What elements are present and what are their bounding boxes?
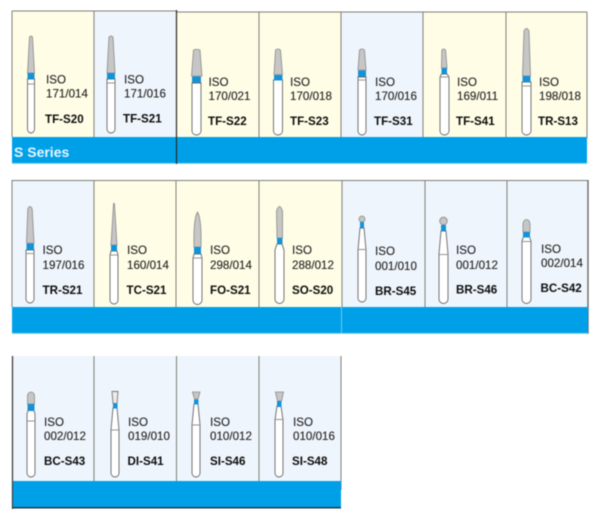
blue bar row 2 — [12, 307, 588, 334]
label DI-S41: ISO — [128, 416, 148, 429]
label TF-S23 — [290, 76, 332, 128]
label SI-S48: 010/016 — [293, 430, 335, 443]
label TF-S20: ISO — [46, 74, 66, 86]
bur BR-S45 — [358, 216, 366, 302]
label TF-S22: ISO — [208, 76, 228, 89]
label SI-S48: SI-S48 — [292, 455, 328, 468]
bur DI-S41 — [111, 392, 119, 477]
label BR-S46: ISO — [456, 244, 476, 257]
bur TF-S41 — [440, 49, 449, 135]
blue bar with S Series label: S Series — [14, 144, 69, 160]
label TR-S13 — [538, 76, 581, 128]
blue bar with S Series label — [12, 137, 587, 164]
label TF-S23: TF-S23 — [290, 115, 329, 128]
label SI-S46: ISO — [210, 416, 230, 429]
label FO-S21: FO-S21 — [210, 284, 251, 297]
label SO-S20: ISO — [292, 244, 312, 257]
label DI-S41: 019/010 — [128, 430, 170, 443]
bur TF-S23 — [274, 49, 282, 135]
label TF-S31: 170/016 — [375, 90, 417, 103]
bur TF-S31 — [358, 49, 366, 135]
label BC-S42 — [540, 243, 583, 295]
label SO-S20: 288/012 — [292, 259, 334, 272]
label TR-S21 — [42, 244, 84, 297]
label FO-S21: ISO — [210, 244, 230, 257]
label TR-S21: ISO — [42, 244, 62, 257]
bur SO-S20 — [275, 206, 284, 304]
label TF-S21 — [123, 74, 166, 126]
panel: row 2 — [12, 180, 588, 334]
label BR-S46: 001/012 — [456, 259, 498, 272]
bur TF-S21 — [107, 36, 115, 133]
cell backgrounds row 2 — [12, 180, 588, 334]
label TF-S21: 171/016 — [124, 88, 166, 100]
label SO-S20 — [292, 244, 334, 297]
label BR-S45: BR-S45 — [375, 285, 417, 298]
label TF-S20 — [45, 74, 88, 126]
bur TR-S21 — [26, 206, 34, 303]
bur TC-S21 — [110, 203, 118, 304]
cell backgrounds row 1 — [12, 11, 587, 138]
bur TR-S13 — [522, 28, 531, 135]
label BC-S42: 002/014 — [541, 257, 583, 270]
label SI-S48 — [292, 416, 335, 468]
label TF-S41: TF-S41 — [456, 115, 495, 128]
label SI-S46: 010/012 — [210, 430, 252, 443]
bur TF-S20 — [28, 36, 34, 133]
label TF-S20: 171/014 — [46, 88, 88, 100]
label TF-S31: ISO — [375, 76, 395, 89]
label BC-S43: ISO — [44, 416, 64, 429]
label TR-S13: TR-S13 — [538, 115, 578, 128]
bur BC-S42 — [522, 220, 531, 304]
label TR-S13: ISO — [539, 76, 559, 89]
label BR-S45 — [375, 245, 417, 298]
bur SI-S48 — [275, 392, 284, 477]
label TF-S41: 169/011 — [457, 90, 498, 103]
label TF-S21: TF-S21 — [123, 112, 162, 126]
label BC-S43: 002/012 — [44, 430, 86, 443]
label BC-S42: ISO — [541, 243, 561, 256]
label TF-S31 — [374, 76, 417, 128]
blue bar row 3 — [12, 481, 341, 508]
panel: row 3 — [12, 356, 341, 509]
label SI-S48: ISO — [293, 416, 313, 429]
label TC-S21: 160/014 — [127, 259, 169, 272]
label DI-S41: DI-S41 — [128, 455, 164, 468]
panel: row 1 S Series — [12, 10, 587, 164]
label SI-S46: SI-S46 — [210, 455, 246, 468]
label TF-S22 — [208, 76, 250, 128]
label BC-S43 — [44, 416, 86, 468]
label TC-S21 — [126, 244, 169, 297]
label TR-S21: 197/016 — [42, 259, 84, 272]
label TF-S21: ISO — [124, 74, 144, 86]
label FO-S21: 298/014 — [210, 259, 252, 272]
label BR-S46 — [456, 244, 498, 296]
cell backgrounds row 3 — [12, 356, 341, 509]
label TC-S21: ISO — [127, 244, 147, 257]
bur TF-S22 — [192, 49, 202, 135]
label DI-S41 — [128, 416, 170, 468]
label BC-S43: BC-S43 — [44, 455, 86, 468]
label BR-S45: 001/010 — [375, 260, 417, 273]
label TF-S41: ISO — [457, 76, 477, 89]
bur FO-S21 — [193, 212, 202, 304]
label TC-S21: TC-S21 — [126, 284, 167, 297]
label TF-S23: ISO — [290, 76, 310, 89]
label TF-S20: TF-S20 — [45, 113, 84, 126]
label TF-S22: 170/021 — [208, 90, 250, 103]
label TR-S21: TR-S21 — [42, 284, 83, 297]
label FO-S21 — [210, 244, 252, 297]
label TF-S41 — [456, 76, 498, 128]
bur BR-S46 — [439, 217, 448, 304]
bur SI-S46 — [192, 392, 200, 477]
label BR-S46: BR-S46 — [456, 284, 498, 296]
bur BC-S43 — [27, 392, 35, 477]
label BR-S45: ISO — [375, 245, 395, 258]
label TF-S31: TF-S31 — [374, 115, 413, 128]
label BC-S42: BC-S42 — [540, 282, 582, 295]
label SI-S46 — [210, 416, 252, 468]
label SO-S20: SO-S20 — [292, 284, 333, 297]
label TF-S22: TF-S22 — [208, 115, 247, 128]
label TF-S23: 170/018 — [290, 90, 332, 103]
label TR-S13: 198/018 — [539, 90, 581, 103]
